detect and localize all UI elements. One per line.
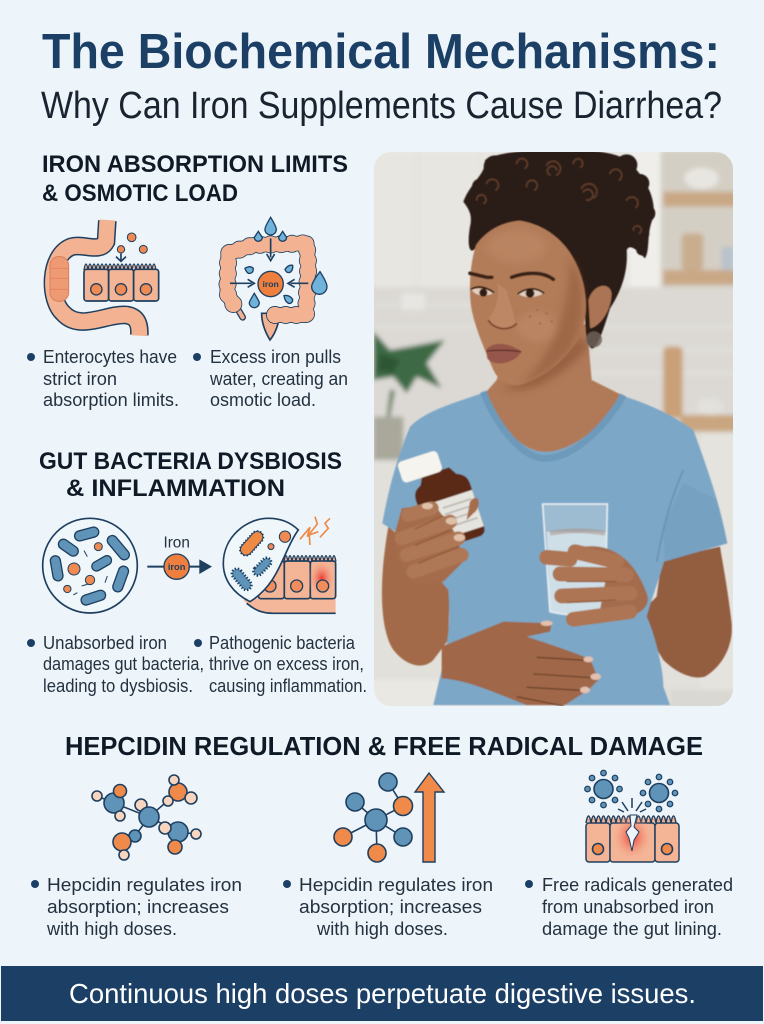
bullet: unabsorbed iron: leading to dysbiosis.: [43, 675, 193, 696]
arrow: iron arrow: iron: [168, 562, 186, 572]
bullet: hepcidin regulates 2: absorption; increases: [299, 896, 482, 917]
footer banner: Continuous high doses perpetuate digestive issues.: [69, 978, 696, 1009]
title: [41, 25, 722, 127]
face: [588, 286, 612, 328]
bullet: enterocytes: strict iron: [43, 368, 117, 389]
title: The Biochemical Mechanisms:: [42, 25, 720, 79]
icon: pathogenic bacteria and inflamed cells: [223, 517, 336, 613]
arrow: iron arrow: Iron: [163, 534, 190, 551]
bullet: enterocytes: Enterocytes have: [43, 346, 177, 367]
bullet: unabsorbed iron: damages gut bacteria,: [43, 653, 204, 674]
arrow: iron arrow: [147, 534, 212, 579]
heading: gut bacteria dysbiosis: [39, 448, 342, 502]
left hand: [467, 498, 479, 520]
heading: iron absorption limits: IRON ABSORPTION LIMITS: [42, 151, 348, 178]
icon: hepcidin molecule with up arrow: [334, 773, 444, 862]
icon: healthy gut bacteria circle: [43, 518, 137, 613]
footer banner: [1, 966, 763, 1021]
bullet: excess iron: osmotic load.: [210, 389, 316, 410]
icon: colon with iron pulling water: [227, 217, 327, 340]
bullet: enterocytes: [27, 346, 179, 410]
glass: [544, 504, 607, 550]
bullet: hepcidin regulates 1: with high doses.: [46, 918, 177, 939]
heading: hepcidin regulation: HEPCIDIN REGULATION & FREE RADICAL DAMAGE: [65, 731, 703, 761]
bullet: pathogenic bacteria: thrive on excess iron,: [209, 653, 364, 674]
bullet: pathogenic bacteria: causing inflammation.: [209, 675, 367, 696]
bullet: free radicals: from unabsorbed iron: [542, 896, 714, 917]
heading: iron absorption limits: [42, 151, 348, 207]
bullet: free radicals: Free radicals generated: [542, 874, 733, 895]
heading: gut bacteria dysbiosis: & INFLAMMATION: [66, 475, 285, 502]
icon: small intestine with enterocytes: [50, 220, 159, 336]
bullet: pathogenic bacteria: Pathogenic bacteria: [209, 632, 356, 653]
icon: free radicals damaging cells: [585, 770, 679, 862]
bullet: excess iron: [193, 346, 348, 410]
bullet: excess iron: Excess iron pulls: [210, 346, 341, 367]
neck: [485, 323, 622, 452]
hair: [463, 150, 655, 348]
bullet: excess iron: water, creating an: [209, 368, 348, 389]
bullet: hepcidin regulates 1: [31, 874, 242, 939]
icon: molecule: [92, 775, 201, 860]
photo: woman holding iron supplement and water: [370, 150, 740, 715]
bullet: hepcidin regulates 1: Hepcidin regulates iron: [47, 874, 242, 895]
icon: colon with iron pulling water: iron: [262, 279, 279, 289]
bullet: hepcidin regulates 2: with high doses.: [316, 918, 448, 939]
bullet: free radicals: [525, 874, 733, 939]
bullet: unabsorbed iron: Unabsorbed iron: [43, 632, 167, 653]
right hand: [585, 546, 649, 614]
bottle: [397, 450, 486, 542]
bullet: hepcidin regulates 2: Hepcidin regulates iron: [299, 874, 493, 895]
bullet: hepcidin regulates 2: [283, 874, 493, 939]
bullet: enterocytes: absorption limits.: [43, 389, 179, 410]
heading: gut bacteria dysbiosis: GUT BACTERIA DYSBIOSIS: [39, 448, 342, 475]
heading: iron absorption limits: & OSMOTIC LOAD: [42, 180, 238, 207]
bullet: hepcidin regulates 1: absorption; increases: [47, 896, 229, 917]
bullet: pathogenic bacteria: [194, 632, 367, 696]
stomach hand: [442, 622, 598, 705]
bullet: unabsorbed iron: [27, 632, 204, 696]
bullet: free radicals: damage the gut lining.: [542, 918, 722, 939]
